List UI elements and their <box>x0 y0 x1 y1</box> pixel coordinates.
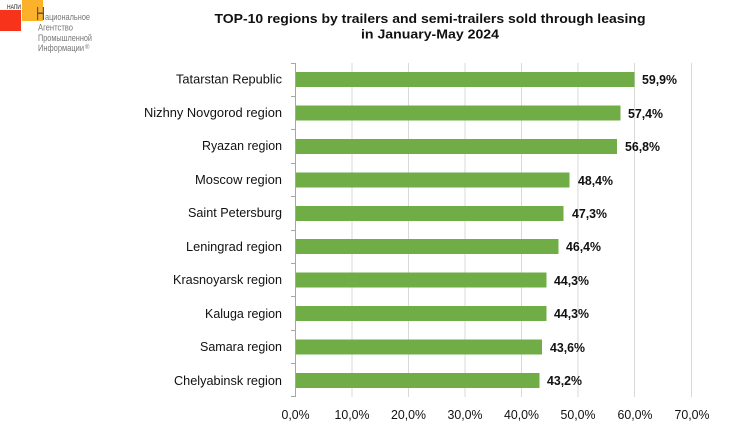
value labels: 44,3% <box>554 306 589 321</box>
grid lines <box>352 63 692 397</box>
x axis labels: 30,0% <box>448 407 483 422</box>
category labels: Chelyabinsk region <box>174 373 282 388</box>
category labels: Kaluga region <box>205 306 282 321</box>
category axis <box>291 63 296 397</box>
value labels: 44,3% <box>554 273 589 288</box>
value labels: 47,3% <box>572 206 607 221</box>
category labels: Samara region <box>200 339 282 354</box>
logo: NAPI: ® <box>85 44 90 51</box>
x axis labels: 40,0% <box>504 407 539 422</box>
title: in January-May 2024 <box>361 28 499 42</box>
value labels: 43,6% <box>550 340 585 355</box>
value labels: 43,2% <box>547 373 582 388</box>
x axis labels <box>282 407 710 422</box>
category labels: Moscow region <box>195 172 282 187</box>
logo: NAPI <box>0 0 92 54</box>
category labels: Ryazan region <box>202 138 282 153</box>
x axis labels: 70,0% <box>674 407 710 422</box>
category labels: Nizhny Novgorod region <box>144 105 282 120</box>
category labels: Tatarstan Republic <box>176 72 282 86</box>
value labels: 46,4% <box>566 239 601 254</box>
x axis labels: 20,0% <box>391 407 426 422</box>
value labels: 57,4% <box>628 106 663 121</box>
value labels: 56,8% <box>625 139 660 154</box>
value labels: 48,4% <box>578 173 613 188</box>
x axis labels: 0,0% <box>282 407 310 422</box>
value labels: 59,9% <box>642 72 677 87</box>
logo: NAPI: Агентство <box>38 22 73 34</box>
logo: NAPI: ациональное <box>45 12 90 23</box>
bar chart <box>144 63 710 422</box>
title <box>214 12 646 42</box>
category labels: Krasnoyarsk region <box>173 272 282 287</box>
logo: NAPI: Н <box>36 4 45 24</box>
x axis labels: 50,0% <box>560 407 596 422</box>
x axis labels: 60,0% <box>618 407 653 422</box>
logo: NAPI: Промышленной <box>38 33 92 44</box>
title: TOP-10 regions by trailers and semi-trailers sold through leasing <box>214 12 646 26</box>
x axis labels: 10,0% <box>334 407 370 422</box>
category labels: Leningrad region <box>186 239 282 254</box>
logo: NAPI: Информации <box>38 43 84 54</box>
logo: NAPI: НАПИ <box>7 5 21 11</box>
category labels: Saint Petersburg <box>188 205 282 220</box>
category labels <box>144 72 282 388</box>
bars <box>296 72 634 388</box>
value labels <box>547 72 677 388</box>
